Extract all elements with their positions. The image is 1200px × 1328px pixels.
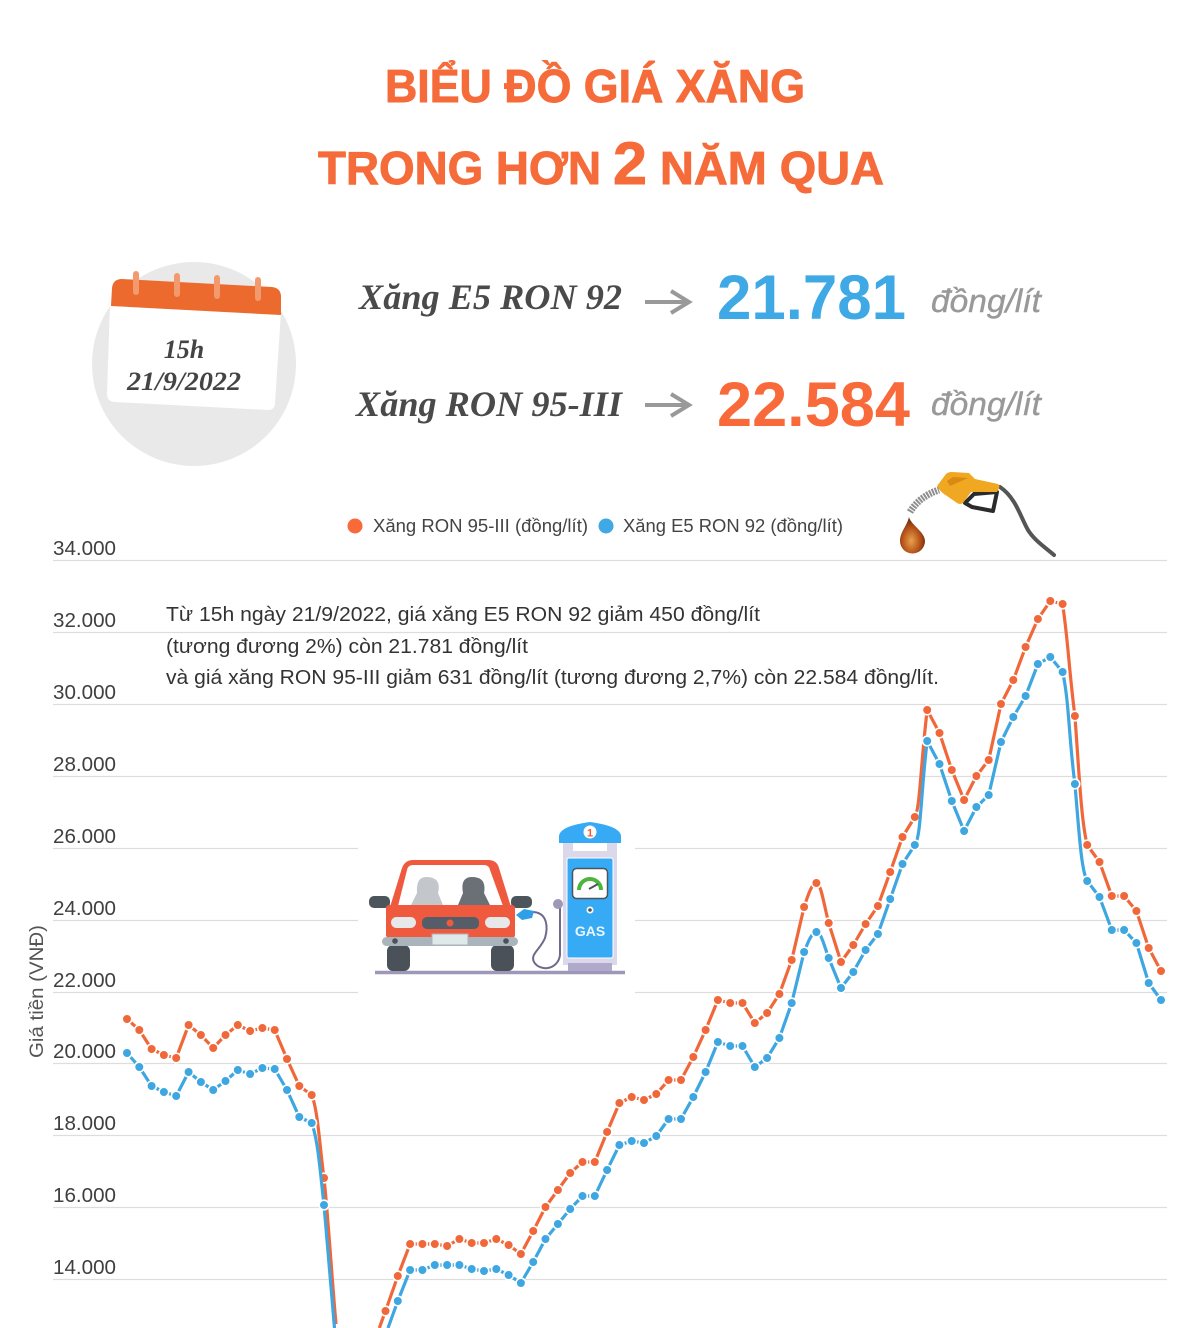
note text: và giá xăng RON 95-III giảm 631 đồng/lít (tương đương 2,7%) còn 22.584 đồng/lít. [166,667,939,689]
chart: y axis labels: 26.000 [53,826,116,848]
chart: gridlines [53,560,1167,1280]
price row: RON 95-III: đồng/lít [931,386,1042,422]
chart: y axis labels: 28.000 [53,754,116,776]
title: NĂM QUA [660,142,884,194]
price row: RON 95-III [355,370,1042,440]
title: 2 [613,130,647,197]
chart: E5 RON 92 price line [127,657,1161,1328]
chart: y axis labels: 22.000 [53,970,116,992]
title: TRONG HƠN [318,142,601,194]
legend: Xăng E5 RON 92 (đồng/lít) [623,515,843,536]
chart: y axis labels [53,538,116,1279]
chart: y axis labels: 20.000 [53,1041,116,1063]
chart: y axis labels: 32.000 [53,610,116,632]
illustration: car at gas pump: 1 [587,828,593,840]
icon: calendar with date: 15h [164,335,204,364]
price row: RON 95-III: Xăng RON 95-III [355,384,624,424]
note text: (tương đương 2%) còn 21.781 đồng/lít [166,636,528,658]
title [318,60,884,197]
chart: y axis labels: 18.000 [53,1113,116,1135]
note text [166,604,939,689]
chart: y axis labels: 30.000 [53,682,116,704]
legend [348,515,843,536]
chart: y axis labels: 16.000 [53,1185,116,1207]
chart: RON 95-III price line [127,601,1161,1328]
title: BIỂU ĐỒ GIÁ XĂNG [385,60,805,112]
chart: y axis labels: 14.000 [53,1257,116,1279]
icon: fuel nozzle with drop [900,472,1054,555]
legend: Xăng RON 95-III (đồng/lít) [373,515,588,536]
icon: calendar with date [92,262,296,466]
price row: E5 RON 92: 21.781 [717,263,906,333]
illustration: car at gas pump: GAS [575,923,605,939]
chart: y axis labels: 24.000 [53,898,116,920]
chart: y axis labels: 34.000 [53,538,116,560]
price row: E5 RON 92 [358,263,1042,333]
icon: calendar with date: 21/9/2022 [126,367,241,396]
price row: E5 RON 92: đồng/lít [931,283,1042,319]
chart: y axis title: Giá tiền (VNĐ) [27,925,48,1058]
price row: E5 RON 92: Xăng E5 RON 92 [358,277,622,317]
price row: RON 95-III: 22.584 [717,370,910,440]
note text: Từ 15h ngày 21/9/2022, giá xăng E5 RON 92 giảm 450 đồng/lít [166,604,760,626]
illustration: car at gas pump [358,790,635,998]
